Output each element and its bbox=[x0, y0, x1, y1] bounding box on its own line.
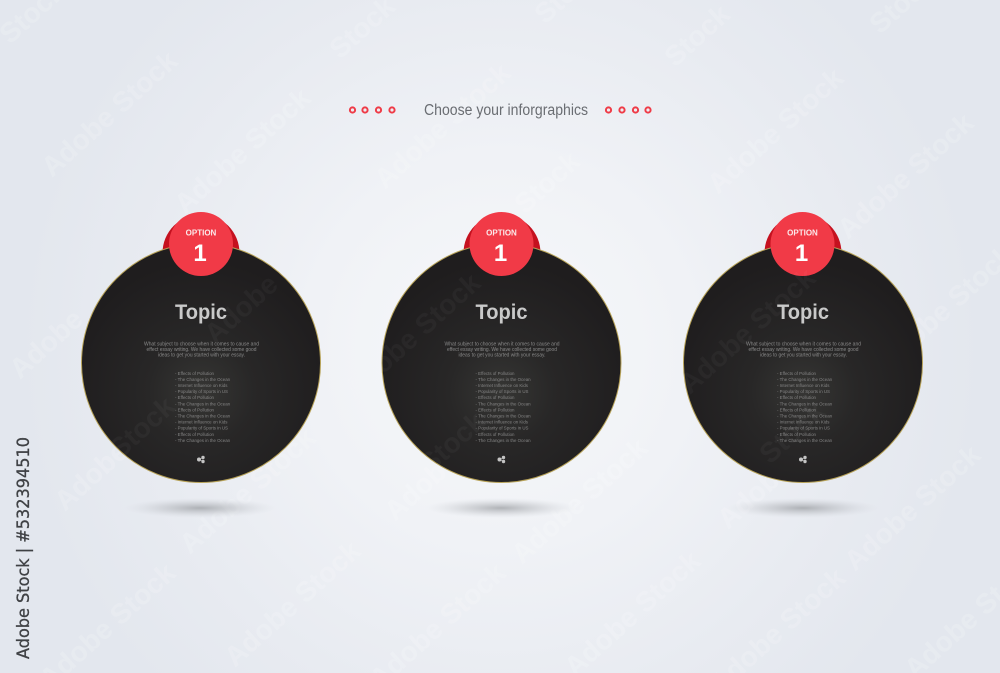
list: - Internet Influence on Kids bbox=[777, 420, 830, 425]
stock watermarks over discs: Adobe Stock bbox=[673, 262, 822, 399]
stock watermarks: Adobe Stock bbox=[48, 379, 197, 516]
list: - Internet Influence on Kids bbox=[175, 383, 228, 388]
list: - Effects of Pollution bbox=[476, 432, 515, 437]
stock watermarks: Stock bbox=[508, 145, 586, 219]
tab behind badge bbox=[464, 214, 540, 292]
list: - The Changes in the Ocean bbox=[175, 414, 231, 418]
stock watermarks: Adobe Stock bbox=[35, 45, 184, 182]
shadow bbox=[425, 498, 577, 518]
shadow bbox=[124, 498, 276, 518]
badge: OPTION bbox=[486, 228, 517, 238]
list: - Popularity of Sports in US bbox=[777, 426, 830, 431]
list: - Popularity of Sports in US bbox=[175, 389, 228, 394]
tab behind badge bbox=[764, 214, 842, 292]
stock watermarks: Adobe Stock bbox=[218, 535, 367, 672]
description: What subject to choose when it comes to cause and bbox=[746, 342, 861, 348]
shadow bbox=[727, 498, 879, 518]
topic heading: Topic bbox=[175, 301, 227, 324]
badge: 1 bbox=[795, 240, 808, 267]
list: - Effects of Pollution bbox=[777, 371, 817, 376]
stock watermarks: Adobe Stock bbox=[711, 397, 860, 534]
stock watermarks: Adobe Stock bbox=[831, 107, 980, 244]
topic heading: Topic bbox=[476, 301, 528, 324]
list: - The Changes in the Ocean bbox=[175, 377, 231, 382]
list: - The Changes in the Ocean bbox=[476, 438, 531, 443]
list: - Internet Influence on Kids bbox=[777, 383, 830, 388]
dots: right bbox=[606, 107, 651, 113]
badge: 1 bbox=[193, 240, 207, 267]
description: ideas to get you started with your essay. bbox=[158, 352, 245, 358]
list: - Effects of Pollution bbox=[777, 395, 817, 400]
disc bbox=[382, 244, 621, 482]
list: - Popularity of Sports in US bbox=[777, 389, 830, 394]
description: effect essay writing. We have collected some good bbox=[146, 347, 257, 353]
stock id label: Adobe Stock | #532394510 bbox=[14, 437, 34, 659]
list: - Effects of Pollution bbox=[476, 407, 515, 412]
description bbox=[444, 342, 560, 358]
stock watermarks: Adobe Stock bbox=[838, 439, 987, 576]
list: - Effects of Pollution bbox=[175, 432, 215, 437]
list: - Effects of Pollution bbox=[476, 371, 515, 376]
stock watermarks over discs: Adobe bbox=[198, 268, 284, 349]
panel: option card 1 bbox=[82, 212, 320, 518]
list: - Effects of Pollution bbox=[175, 371, 215, 376]
badge: OPTION bbox=[186, 228, 217, 238]
stock watermarks: Adobe Stock bbox=[173, 422, 322, 559]
panel: option card 3 bbox=[684, 212, 922, 518]
list: - Effects of Pollution bbox=[777, 407, 817, 412]
list: - The Changes in the Ocean bbox=[777, 438, 833, 443]
stock watermarks: Adobe Stock bbox=[368, 57, 517, 194]
list: - The Changes in the Ocean bbox=[777, 414, 833, 418]
badge bbox=[770, 212, 834, 276]
badge: 1 bbox=[494, 240, 507, 267]
tab behind badge bbox=[162, 214, 240, 292]
stock watermarks over discs: Adobe Stock bbox=[338, 267, 487, 404]
list: - The Changes in the Ocean bbox=[175, 438, 231, 443]
description: ideas to get you started with your essay. bbox=[458, 352, 546, 358]
list: - The Changes in the Ocean bbox=[476, 414, 531, 418]
list: - The Changes in the Ocean bbox=[175, 401, 231, 406]
stock watermarks: Stock bbox=[658, 0, 736, 72]
list: - Effects of Pollution bbox=[175, 395, 215, 400]
description bbox=[144, 342, 259, 358]
description: effect essay writing. We have collected some good bbox=[447, 347, 557, 353]
list: - Internet Influence on Kids bbox=[476, 383, 529, 388]
stock watermarks: Adobe Stock bbox=[168, 82, 317, 219]
description bbox=[746, 342, 861, 358]
description: effect essay writing. We have collected some good bbox=[748, 347, 859, 353]
description: What subject to choose when it comes to cause and bbox=[444, 342, 560, 348]
dots: left bbox=[350, 107, 395, 113]
topic heading: Topic bbox=[777, 301, 829, 324]
list bbox=[777, 371, 833, 443]
description: ideas to get you started with your essay. bbox=[760, 352, 847, 358]
stock watermarks over discs: Stock bbox=[413, 405, 491, 479]
stock watermarks over discs: Stock bbox=[753, 395, 831, 469]
list: - Internet Influence on Kids bbox=[175, 420, 228, 425]
panel: option card 2 bbox=[382, 212, 621, 518]
stock watermarks over discs bbox=[103, 262, 831, 479]
list: - The Changes in the Ocean bbox=[476, 377, 531, 382]
badge bbox=[169, 212, 233, 276]
list: - Popularity of Sports in US bbox=[476, 389, 529, 394]
list: - The Changes in the Ocean bbox=[777, 401, 833, 406]
list: - Effects of Pollution bbox=[476, 395, 515, 400]
stock watermarks over discs: Stock bbox=[103, 390, 181, 464]
header row bbox=[350, 102, 651, 119]
list: - Internet Influence on Kids bbox=[476, 420, 529, 425]
icon: share bbox=[498, 456, 505, 463]
heading: Choose your inforgraphics bbox=[424, 102, 588, 119]
list: - Popularity of Sports in US bbox=[175, 426, 228, 431]
description: What subject to choose when it comes to cause and bbox=[144, 342, 259, 348]
stock watermarks: Adobe Stock bbox=[505, 432, 654, 569]
icon: share bbox=[197, 456, 204, 463]
list bbox=[175, 371, 231, 443]
list: - The Changes in the Ocean bbox=[476, 401, 531, 406]
list: - The Changes in the Ocean bbox=[777, 377, 833, 382]
list: - Effects of Pollution bbox=[175, 407, 215, 412]
stock watermarks: Adobe Stock bbox=[378, 389, 527, 526]
icon: share bbox=[799, 456, 806, 463]
list: - Effects of Pollution bbox=[777, 432, 817, 437]
disc bbox=[684, 244, 922, 482]
list bbox=[476, 371, 531, 443]
stock watermarks: Adobe bbox=[3, 303, 89, 384]
disc bbox=[82, 244, 320, 482]
list: - Popularity of Sports in US bbox=[476, 426, 529, 431]
stock watermarks: Adobe Stock bbox=[701, 62, 850, 199]
badge: OPTION bbox=[787, 228, 818, 238]
badge bbox=[470, 212, 534, 276]
